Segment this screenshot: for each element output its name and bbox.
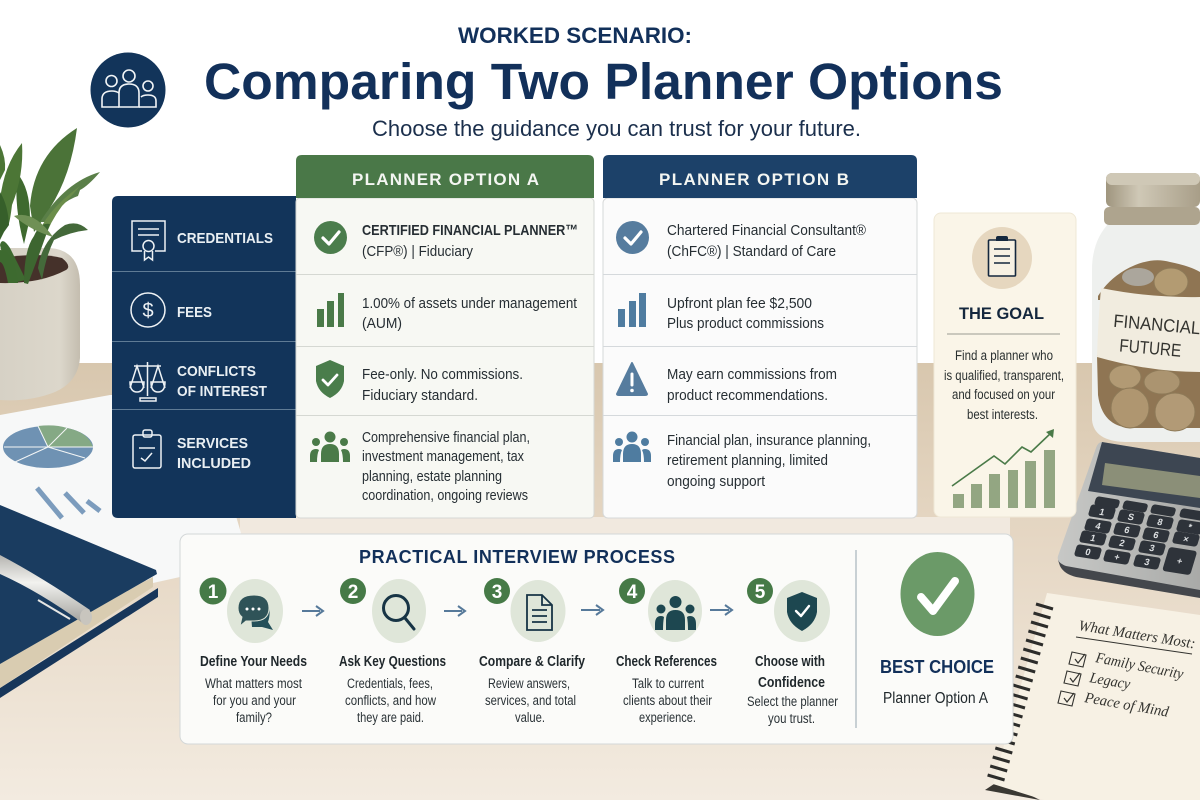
text: fees A: (AUM) <box>362 315 402 332</box>
step 1: What matters most <box>205 676 302 691</box>
decor: calculator: 3 <box>1148 543 1156 553</box>
decor: potted plant <box>0 128 100 400</box>
title block <box>204 23 1003 141</box>
icon: dollar circle: $ <box>142 300 154 322</box>
text: conflicts A: Fiduciary standard. <box>362 387 478 404</box>
text: credentials A: (CFP®) | Fiduciary <box>362 243 473 260</box>
step 3: Review answers, <box>488 676 570 691</box>
panel: planner option A <box>296 155 594 518</box>
decor: calculator: 2 <box>1118 538 1126 548</box>
best choice callout: Planner Option A <box>883 690 989 707</box>
text: services A <box>362 429 530 504</box>
title block: Comparing Two Planner Options <box>204 53 1003 110</box>
label: credentials: CREDENTIALS <box>177 230 273 247</box>
text: credentials A: CERTIFIED FINANCIAL PLANNER™ <box>362 222 578 239</box>
step 1: family? <box>236 710 272 725</box>
text: services A: coordination, ongoing reviews <box>362 487 528 504</box>
arrow <box>710 605 732 615</box>
step 4: clients about their <box>623 693 712 708</box>
label: conflicts of interest: OF INTEREST <box>177 383 267 400</box>
text block: best interests. <box>967 407 1038 422</box>
handwritten text <box>1058 618 1196 721</box>
text: fees B: Plus product commissions <box>667 315 824 332</box>
panel: the goal <box>934 213 1076 517</box>
step 5: Choose with <box>755 654 825 670</box>
step 4: experience. <box>639 710 696 725</box>
decor: navy notebook with pen <box>0 505 158 698</box>
jar label text: FUTURE <box>1119 335 1182 361</box>
step 1: Define Your Needs <box>200 654 307 670</box>
arrow <box>444 606 465 616</box>
handwritten text: Legacy <box>1087 670 1132 693</box>
label: services included: INCLUDED <box>177 455 251 472</box>
text: services B <box>667 432 871 490</box>
text block <box>944 348 1064 422</box>
label: conflicts of interest: CONFLICTS <box>177 363 256 380</box>
icon: document <box>527 595 552 630</box>
text: conflicts A <box>362 366 523 404</box>
text: fees A <box>362 295 578 332</box>
text block: and focused on your <box>952 387 1055 402</box>
step 4: Talk to current <box>632 676 704 691</box>
icon: people group badge <box>90 52 166 128</box>
text: fees A: 1.00% of assets under management <box>362 295 578 312</box>
text: services B: ongoing support <box>667 473 766 490</box>
heading: THE GOAL <box>959 304 1044 323</box>
text: credentials B <box>667 222 866 260</box>
decor: spiral notebook with handwritten list <box>985 593 1200 800</box>
decor: calculator: 1 <box>1098 507 1106 517</box>
text: credentials A <box>362 222 578 260</box>
step 3 <box>479 578 585 725</box>
panel: planner option B <box>603 155 917 518</box>
decor: calculator: * <box>1187 522 1194 532</box>
step 5 <box>747 578 838 726</box>
icon: magnifier <box>384 596 414 629</box>
step 2: 2 <box>348 582 358 603</box>
step 3: value. <box>515 710 545 725</box>
step 5: you trust. <box>768 711 815 726</box>
comparison table <box>112 155 917 518</box>
icon: balance scale <box>130 362 165 401</box>
step 5: 5 <box>755 582 766 603</box>
step 1 <box>200 578 307 725</box>
step 2 <box>339 578 446 725</box>
label: services included: SERVICES <box>177 435 248 452</box>
title block: WORKED SCENARIO: <box>458 23 692 48</box>
chart: rising bars with arrow <box>952 429 1055 508</box>
title block: Choose the guidance you can trust for your future. <box>372 116 861 141</box>
step 5: Confidence <box>758 675 825 691</box>
decor: calculator: 4 <box>1094 521 1103 531</box>
best choice callout: BEST CHOICE <box>880 657 994 677</box>
text: services B: Financial plan, insurance planning, <box>667 432 871 449</box>
heading: PRACTICAL INTERVIEW PROCESS <box>359 547 675 567</box>
decor: calculator: S <box>1127 512 1135 522</box>
text block: is qualified, transparent, <box>944 368 1064 383</box>
icon: chat bubbles <box>238 595 273 630</box>
icon: green check circle <box>314 221 347 254</box>
text: conflicts A: Fee-only. No commissions. <box>362 366 523 383</box>
decor: calculator: 1 <box>1089 533 1097 543</box>
panel: planner option B: PLANNER OPTION B <box>659 170 849 189</box>
best choice callout <box>880 552 994 707</box>
label: services included <box>177 435 251 472</box>
icon: blue people <box>613 432 651 462</box>
icon: green people <box>310 432 350 462</box>
decor: calculator: 6 <box>1123 525 1131 535</box>
icon: clipboard check <box>133 430 161 468</box>
panel: row labels <box>112 196 296 518</box>
step 4: 4 <box>627 582 638 603</box>
decor: paper with pie chart <box>0 395 241 583</box>
decor: calculator: × <box>1182 534 1191 544</box>
text block: Find a planner who <box>955 348 1053 363</box>
icon: dollar circle <box>131 293 165 327</box>
decor: calculator: 0 <box>1084 547 1092 557</box>
handwritten text: What Matters Most: <box>1077 618 1196 652</box>
text: services A: planning, estate planning <box>362 468 502 485</box>
step 5: Select the planner <box>747 694 838 709</box>
text: services B: retirement planning, limited <box>667 452 828 469</box>
step 4 <box>616 578 717 725</box>
decor: calculator: + <box>1113 552 1122 562</box>
icon: green shield check <box>316 360 344 398</box>
panel: planner option A: PLANNER OPTION A <box>352 170 539 189</box>
step 2: Credentials, fees, <box>347 676 433 691</box>
decor: calculator: 8 <box>1156 517 1164 527</box>
arrow <box>581 605 603 615</box>
handwritten text: Peace of Mind <box>1082 690 1170 721</box>
text: conflicts B: product recommendations. <box>667 387 828 404</box>
decor: calculator: + <box>1176 556 1184 566</box>
icon: warning triangle <box>617 363 647 395</box>
text: credentials B: (ChFC®) | Standard of Care <box>667 243 836 260</box>
icon: certificate <box>132 221 165 260</box>
decor: calculator <box>1058 442 1200 598</box>
step 4: Check References <box>616 654 717 670</box>
icon: clipboard <box>972 227 1032 289</box>
step 2: conflicts, and how <box>345 693 436 708</box>
decor: calculator: 6 <box>1152 530 1160 540</box>
handwritten text: Family Security <box>1093 650 1185 683</box>
step 1: 1 <box>208 582 219 603</box>
text: conflicts B: May earn commissions from <box>667 366 837 383</box>
icon: blue check circle <box>616 221 649 254</box>
icon: blue bars <box>618 293 646 327</box>
step 2: Ask Key Questions <box>339 654 446 670</box>
step 2: they are paid. <box>357 710 424 725</box>
text: services A: Comprehensive financial plan, <box>362 429 530 446</box>
label: conflicts of interest <box>177 363 267 400</box>
icon: people <box>655 596 696 630</box>
step 1: for you and your <box>213 693 296 708</box>
arrow <box>302 606 323 616</box>
icon: shield check <box>787 592 817 631</box>
text: services A: investment management, tax <box>362 448 524 465</box>
decor: calculator: 3 <box>1143 557 1151 567</box>
text: fees B: Upfront plan fee $2,500 <box>667 295 812 312</box>
jar label text <box>1111 311 1200 362</box>
text: fees B <box>667 295 824 332</box>
icon: green bars <box>317 293 344 327</box>
decor: savings jar labelled Financial Future <box>1092 173 1200 442</box>
text: conflicts B <box>667 366 837 404</box>
label: fees: FEES <box>177 304 212 321</box>
panel: practical interview process <box>180 534 1013 744</box>
step 3: 3 <box>492 582 502 603</box>
step 3: Compare & Clarify <box>479 654 585 670</box>
step 3: services, and total <box>485 693 576 708</box>
text: credentials B: Chartered Financial Consultant® <box>667 222 866 239</box>
